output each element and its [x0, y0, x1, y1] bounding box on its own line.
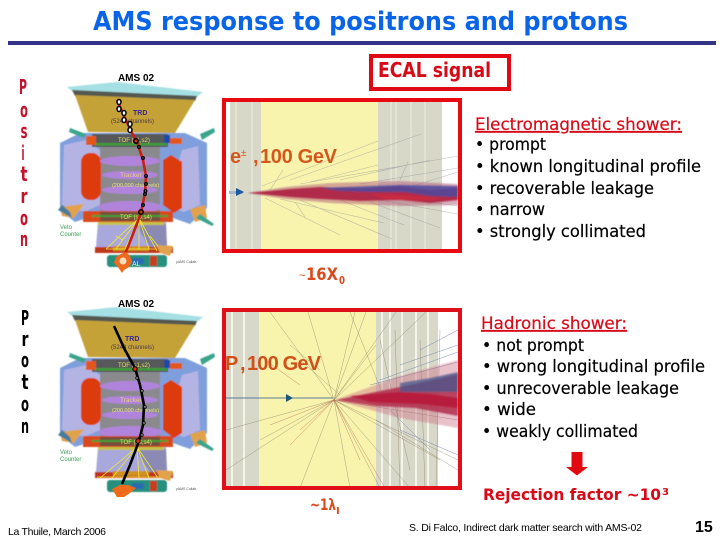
- hadronic shower text: Hadronic shower:: [481, 314, 627, 334]
- interaction length label: I: [336, 506, 340, 517]
- vertical label: Positron: o: [20, 206, 28, 230]
- shower core: [247, 181, 458, 206]
- vertical label: Positron: t: [20, 162, 28, 186]
- vertical label: Positron: r: [20, 184, 28, 208]
- detector diagram: positron: Veto: [60, 225, 73, 231]
- detector diagram: positron: AMS 02: [118, 73, 154, 84]
- frame: [224, 310, 460, 488]
- energy label: P: [225, 353, 238, 375]
- radiation length label: ~: [299, 270, 305, 282]
- detector diagram: positron: TOF (s1,s2): [118, 138, 150, 144]
- energy label: ±: [241, 148, 247, 159]
- shower burst: [114, 252, 132, 273]
- electromagnetic shower text: [475, 115, 701, 242]
- title: AMS response to positrons and protons: [93, 7, 628, 37]
- ECAL fan: [97, 447, 160, 478]
- frame: [224, 100, 460, 251]
- shower burst: [112, 485, 136, 497]
- vertical label: Positron: [19, 75, 28, 251]
- scattered tracks: [226, 312, 458, 488]
- footer: location and date: La Thuile, March 2006: [8, 526, 106, 538]
- detector diagram: proton: TRD: [125, 336, 139, 343]
- detector diagram: proton: TOF (s1,s2): [118, 363, 150, 369]
- positron shower panel: [224, 100, 460, 251]
- shower tracks: [262, 134, 458, 239]
- incoming arrow: [229, 191, 243, 194]
- energy label: e: [230, 146, 241, 168]
- detector diagram: positron: AL: [132, 261, 141, 268]
- vertical label: Positron: o: [20, 98, 28, 122]
- detector diagram: proton: (200,000 channels): [112, 408, 159, 414]
- vertical label: Proton: t: [22, 370, 29, 394]
- track hits: [133, 367, 146, 443]
- ECAL signal callout: ECAL signal: [378, 58, 491, 82]
- detector diagram: positron: TRD: [133, 110, 147, 117]
- footer: author: S. Di Falco, Indirect dark matter search with AMS-02: [409, 522, 642, 534]
- hadronic shower text: • weakly collimated: [482, 422, 638, 442]
- electromagnetic shower text: • recoverable leakage: [475, 179, 654, 199]
- vertical label: Proton: o: [21, 348, 29, 372]
- vertical label: Proton: P: [21, 306, 29, 330]
- hadronic shower core: [334, 360, 458, 428]
- hadronic shower text: [481, 314, 705, 442]
- radiation length label: 0: [339, 274, 345, 287]
- ECAL fan: [106, 218, 158, 251]
- hadronic shower text: • not prompt: [482, 336, 584, 356]
- vertical label: Proton: r: [22, 327, 29, 351]
- detector diagram: proton: [58, 299, 215, 497]
- detector diagram: positron: Counter: [60, 232, 81, 238]
- energy label: 100 GeV: [247, 353, 322, 375]
- title rule: [8, 41, 716, 45]
- rejection factor: 3: [662, 487, 669, 498]
- detector diagram: proton: Tracker: [120, 397, 143, 404]
- detector diagram: proton: yAMS Collab.: [176, 487, 197, 491]
- proton shower panel: [224, 310, 460, 488]
- arrow: down to rejection factor: [566, 452, 588, 476]
- vertical label: Positron: s: [20, 119, 28, 143]
- ECAL signal callout: [371, 56, 509, 89]
- vertical label: Positron: P: [19, 75, 27, 99]
- electromagnetic shower text: Electromagnetic shower:: [475, 115, 682, 135]
- detector diagram: proton: AMS 02: [118, 299, 154, 310]
- electromagnetic shower text: • known longitudinal profile: [475, 157, 701, 177]
- hadronic shower text: • unrecoverable leakage: [482, 379, 679, 399]
- detector diagram: positron: (200,000 channels): [112, 183, 159, 189]
- energy label: ,: [240, 353, 246, 375]
- vertical label: Proton: o: [21, 392, 29, 416]
- particle track: [114, 326, 144, 484]
- page number: 15: [695, 519, 713, 536]
- energy label: ,: [253, 146, 259, 168]
- incoming track and arrow: [226, 397, 333, 399]
- detector diagram: proton: (5248 channels): [111, 345, 154, 351]
- electromagnetic shower text: • narrow: [475, 200, 545, 220]
- detector diagram: proton: Veto: [60, 450, 73, 456]
- detector diagram: proton: TOF (s3,s4): [120, 440, 152, 446]
- detector diagram: positron: TOF (s3,s4): [120, 215, 152, 221]
- interaction length label: ~1λ: [310, 495, 336, 514]
- detector diagram: positron: yAMS Collab.: [176, 260, 197, 264]
- vertical label: Proton: [21, 306, 29, 438]
- hadronic shower text: • wrong longitudinal profile: [482, 357, 705, 377]
- particle track: [117, 100, 146, 260]
- energy label: 100 GeV: [260, 146, 338, 168]
- track hits: [117, 100, 147, 214]
- detector diagram: positron: [58, 73, 215, 273]
- detector diagram: positron: (5248 channels): [111, 119, 154, 125]
- hadronic shower text: • wide: [482, 400, 536, 420]
- electromagnetic shower text: • prompt: [475, 135, 546, 155]
- detector diagram: positron: Tracker: [120, 172, 143, 179]
- vertical label: Positron: i: [22, 141, 24, 165]
- electromagnetic shower text: • strongly collimated: [475, 222, 646, 242]
- radiation length label: 16X: [306, 265, 338, 285]
- vertical label: Proton: n: [21, 414, 29, 438]
- rejection factor: Rejection factor ~10: [483, 485, 661, 504]
- detector diagram: proton: Counter: [60, 457, 81, 463]
- vertical label: Positron: n: [20, 227, 28, 251]
